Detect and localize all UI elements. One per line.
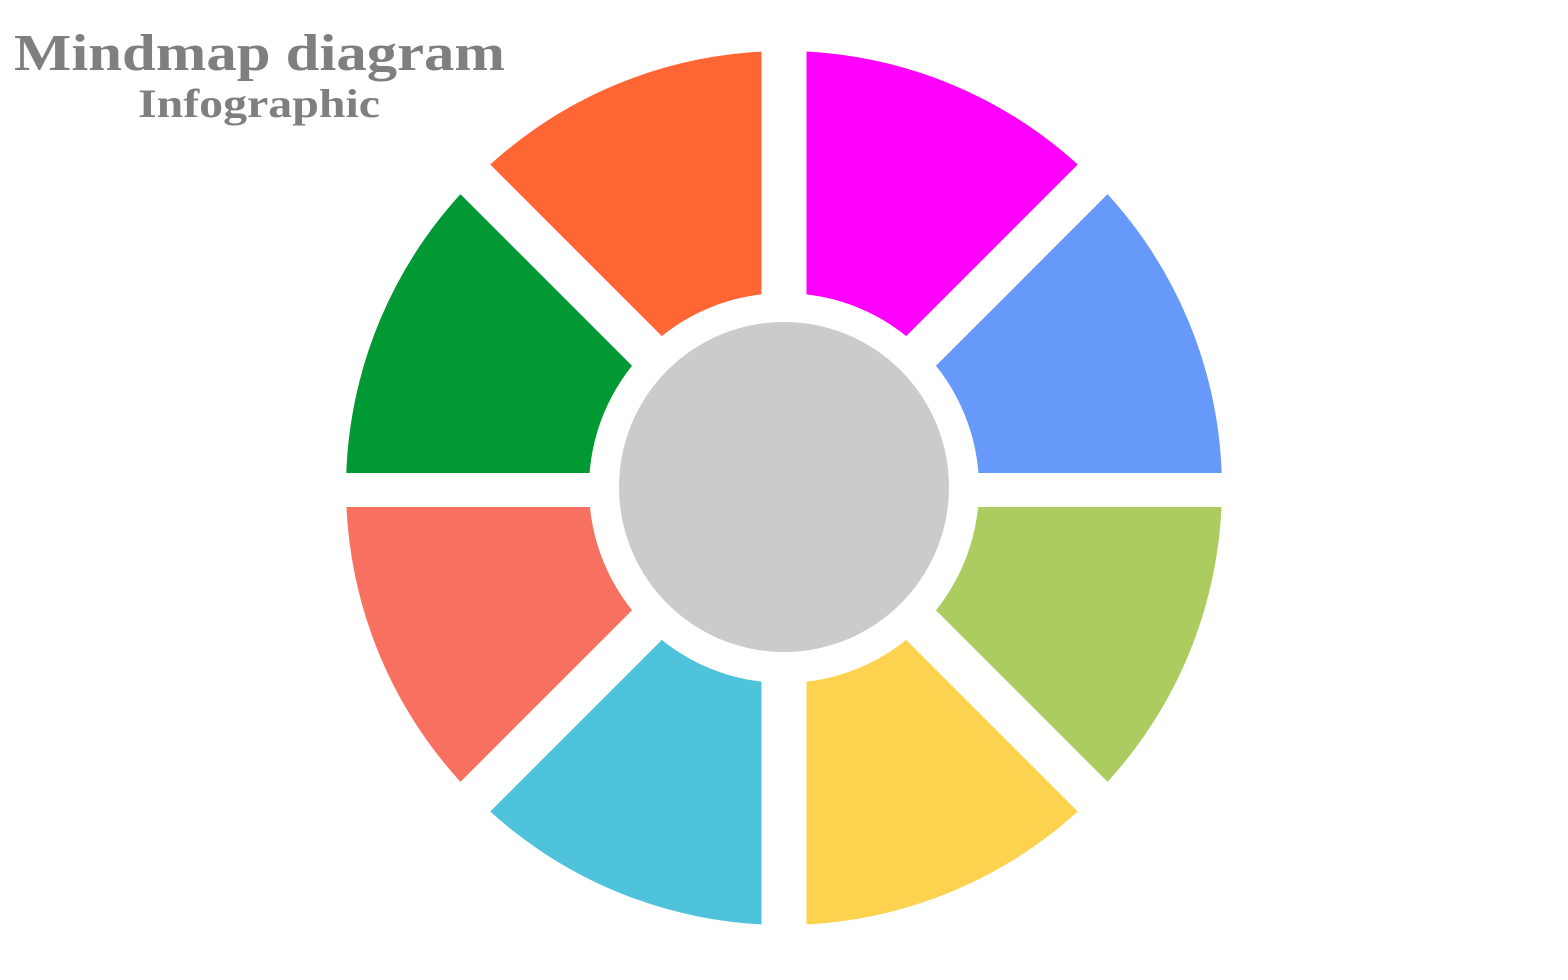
- segment: salmon: [346, 488, 784, 797]
- title: Mindmap diagram: [14, 25, 505, 82]
- segment: magenta: [784, 51, 1093, 488]
- segment: cyan: [475, 488, 784, 925]
- segment: blue: [784, 179, 1222, 488]
- subtitle: Infographic: [138, 81, 380, 126]
- wheel diagram: [320, 30, 1250, 950]
- segment: lime: [784, 488, 1222, 797]
- center circle: [619, 322, 949, 652]
- segment: yellow: [784, 488, 1093, 925]
- segment: orange: [475, 51, 784, 488]
- segment: green: [346, 179, 784, 488]
